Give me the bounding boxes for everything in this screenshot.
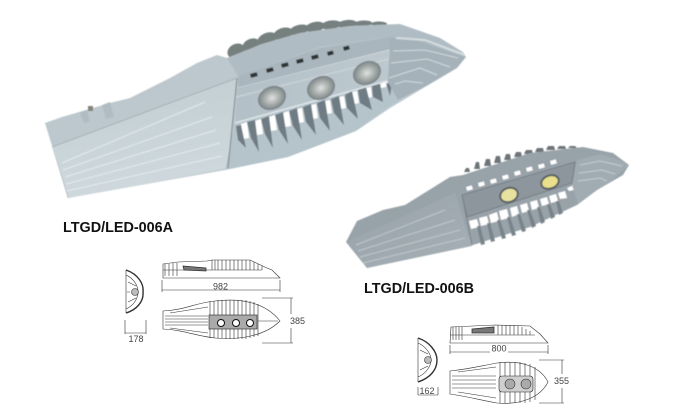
value 178: 178 bbox=[128, 334, 144, 344]
dimension 162 bbox=[418, 387, 438, 395]
dimension 800 bbox=[450, 345, 548, 354]
dimension 355 bbox=[539, 360, 564, 403]
fin slots bbox=[469, 184, 577, 229]
lower fin bank bbox=[477, 201, 563, 245]
lamp photo: LTGD/LED-006A bbox=[45, 19, 466, 199]
tail separator bbox=[228, 78, 237, 168]
tail face with streaks bbox=[52, 78, 237, 199]
side view A bbox=[163, 260, 280, 278]
label: LTGD/LED-006A: LTGD/LED-006A bbox=[63, 220, 174, 236]
lugs bbox=[80, 102, 114, 123]
value 162: 162 bbox=[419, 386, 435, 396]
side view B bbox=[450, 325, 548, 343]
nose bbox=[572, 154, 629, 204]
lenses bbox=[498, 173, 561, 205]
dimension 178 bbox=[125, 320, 146, 334]
nose with chevron folds bbox=[388, 37, 466, 100]
value 385: 385 bbox=[290, 316, 305, 326]
top view A bbox=[163, 300, 280, 339]
upper vent band bbox=[238, 37, 390, 88]
upper shell band bbox=[227, 24, 466, 76]
top fins bbox=[464, 146, 577, 172]
end view B bbox=[418, 338, 437, 382]
lenses bbox=[258, 60, 382, 110]
drawing set A bbox=[125, 260, 293, 343]
housing bbox=[45, 24, 466, 198]
value 982: 982 bbox=[213, 282, 228, 292]
end view A bbox=[126, 270, 143, 313]
top view B bbox=[450, 362, 548, 403]
label: LTGD/LED-006B: LTGD/LED-006B bbox=[364, 281, 474, 297]
value 355: 355 bbox=[554, 376, 569, 386]
lamp photo: LTGD/LED-006B bbox=[346, 146, 629, 268]
LED plate bbox=[462, 162, 575, 217]
housing bbox=[346, 147, 629, 268]
top cooling fins bbox=[225, 19, 387, 62]
drawing set B bbox=[418, 325, 564, 403]
LED plate bbox=[235, 50, 390, 123]
value 800: 800 bbox=[491, 344, 507, 354]
dimension 982 bbox=[162, 280, 280, 292]
dimension 385 bbox=[262, 298, 293, 343]
upper vents bbox=[466, 159, 557, 191]
tail face bbox=[346, 193, 472, 268]
lower fin bank bbox=[226, 154, 229, 169]
